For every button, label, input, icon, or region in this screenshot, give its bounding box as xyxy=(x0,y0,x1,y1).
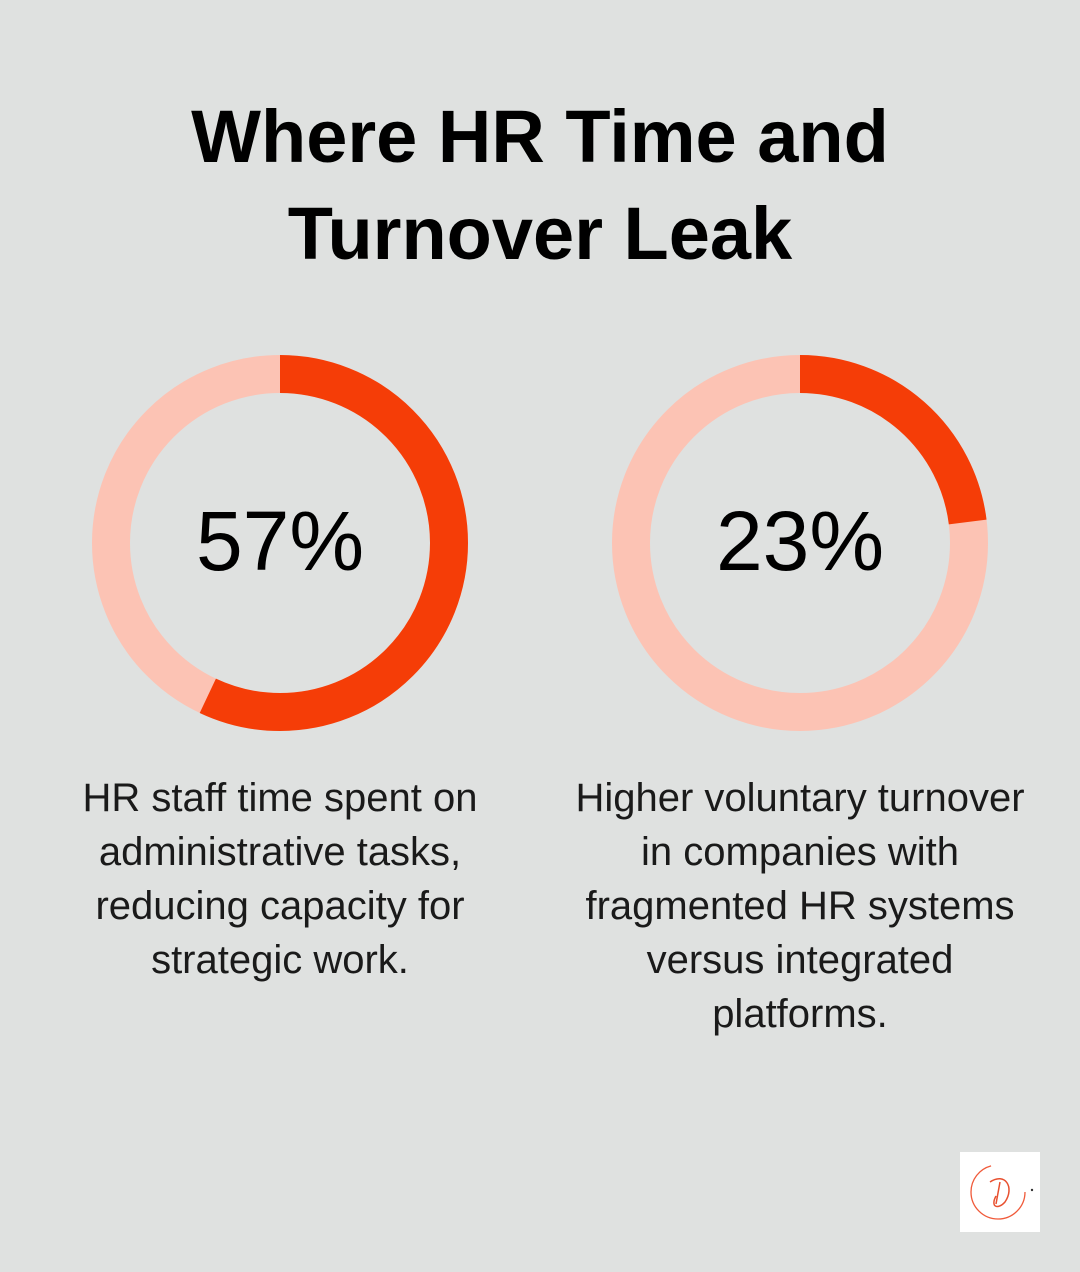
text: right description: platforms. xyxy=(712,992,888,1036)
value 23%: 23% xyxy=(716,494,884,588)
text: right description: in companies with xyxy=(641,830,959,874)
text: left description: strategic work. xyxy=(151,938,409,982)
text: left description: HR staff time spent on xyxy=(82,776,478,820)
donut 57% xyxy=(92,355,468,731)
logo xyxy=(960,1152,1040,1232)
text: right description xyxy=(575,776,1025,1036)
donut 23% xyxy=(612,355,988,731)
text: right description: Higher voluntary turnover xyxy=(575,776,1025,820)
title xyxy=(191,95,889,275)
title: Turnover Leak xyxy=(288,192,792,275)
title: Where HR Time and xyxy=(191,95,889,178)
text: right description: versus integrated xyxy=(647,938,953,982)
text: left description xyxy=(82,776,478,982)
text: left description: administrative tasks, xyxy=(99,830,461,874)
value 57%: 57% xyxy=(196,494,364,588)
text: left description: reducing capacity for xyxy=(95,884,465,928)
text: right description: fragmented HR systems xyxy=(585,884,1015,928)
